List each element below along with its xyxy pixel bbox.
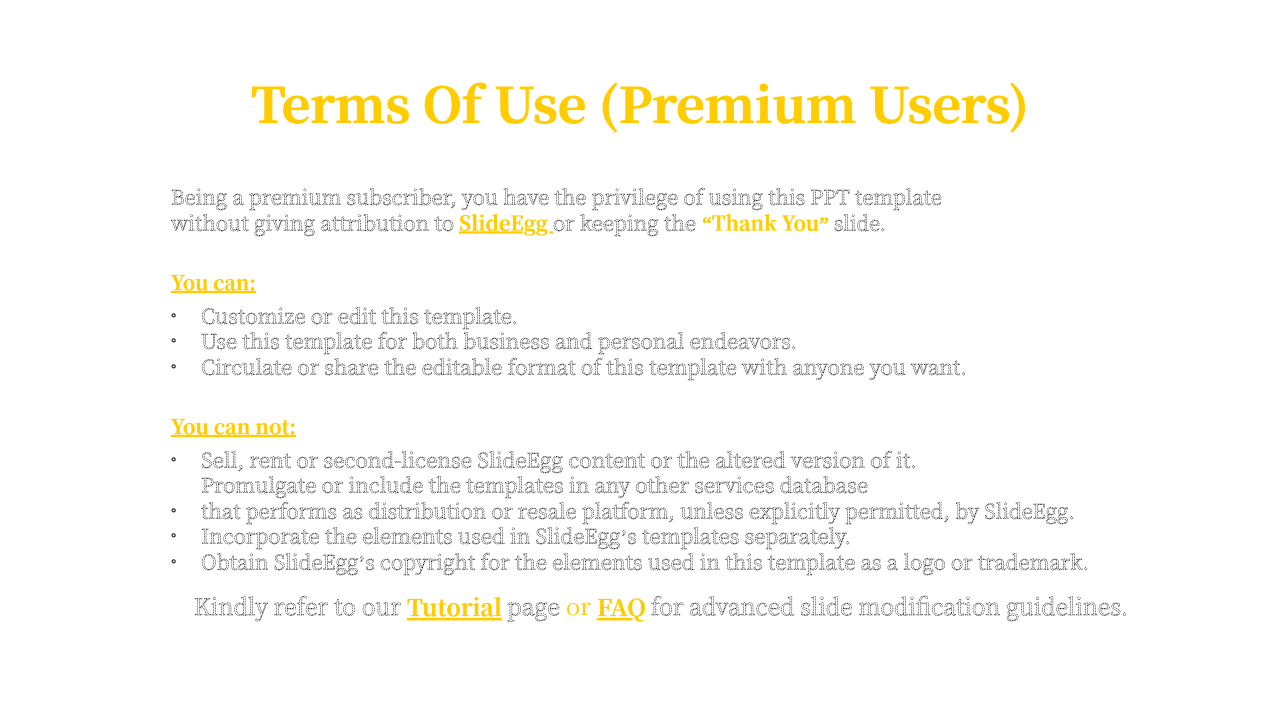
text block: introduction: SlideEgg bbox=[459, 208, 553, 236]
list: prohibited uses: Promulgate or include the templates in any other services database bbox=[201, 470, 868, 498]
list: prohibited uses: Sell, rent or second-license SlideEgg content or the altered version of it. bbox=[201, 444, 917, 474]
list: permitted uses: Customize or edit this template. bbox=[201, 300, 518, 330]
footer note: page bbox=[507, 589, 560, 622]
list: permitted uses: ◦ bbox=[171, 308, 176, 324]
text block: introduction: slide. bbox=[834, 208, 886, 236]
text block: introduction: “Thank You” bbox=[702, 208, 829, 236]
footer note: Tutorial bbox=[407, 590, 502, 623]
footer note: Kindly refer to our bbox=[194, 589, 401, 622]
footer note bbox=[194, 589, 1128, 623]
heading: you can not: You can not: bbox=[171, 411, 296, 440]
text block: introduction: without giving attribution to bbox=[170, 208, 454, 236]
footer note: for advanced slide modification guidelines. bbox=[651, 589, 1128, 622]
list: permitted uses: Circulate or share the editable format of this template with anyone you want. bbox=[201, 352, 967, 380]
list: prohibited uses: that performs as distribution or resale platform, unless explicitly permitted, by SlideEgg. bbox=[201, 496, 1075, 524]
list: permitted uses bbox=[171, 300, 967, 380]
list: permitted uses: Use this template for both business and personal endeavors. bbox=[201, 326, 797, 354]
list: prohibited uses bbox=[171, 444, 1089, 576]
list: prohibited uses: ◦ bbox=[171, 554, 176, 570]
list: permitted uses: ◦ bbox=[171, 333, 176, 349]
list: prohibited uses: Incorporate the elements used in SlideEgg ’s templates separately. bbox=[201, 520, 851, 550]
list: prohibited uses: ◦ bbox=[171, 503, 176, 519]
footer note: FAQ bbox=[597, 590, 646, 623]
footer note: or bbox=[566, 589, 591, 622]
list: permitted uses: ◦ bbox=[171, 359, 176, 375]
list: prohibited uses: ◦ bbox=[171, 528, 176, 544]
list: prohibited uses: ◦ bbox=[171, 452, 176, 468]
text block: introduction: Being a premium subscriber, you have the privilege of using this PPT template bbox=[171, 182, 942, 210]
heading: you can: You can: bbox=[171, 267, 256, 296]
list: prohibited uses: Obtain SlideEgg’s copyright for the elements used in this template as a logo or trademark. bbox=[201, 546, 1089, 576]
title: Terms Of Use (Premium Users) bbox=[251, 68, 1029, 136]
text block: introduction bbox=[170, 182, 942, 236]
text block: introduction: or keeping the bbox=[553, 208, 696, 236]
